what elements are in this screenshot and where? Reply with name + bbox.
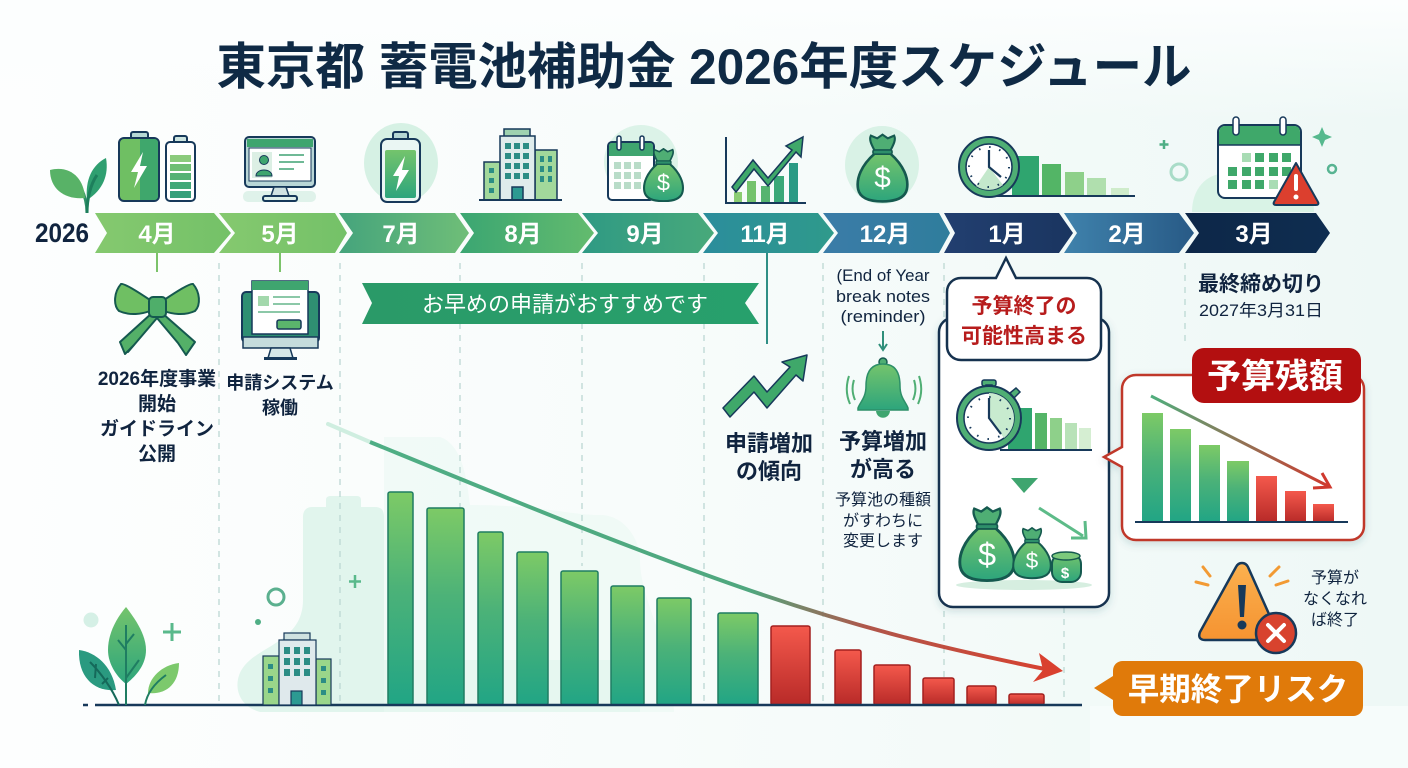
timeline chevrons [95, 213, 1330, 253]
icon: deadline calendar with warning [1160, 117, 1336, 212]
April text block: 公開 [138, 443, 176, 465]
background blob behind chart [237, 437, 674, 712]
November text block: 申請増加 [725, 431, 813, 456]
month: July [339, 213, 469, 253]
December heading: 予算増加 [839, 429, 927, 454]
month: August [460, 213, 594, 253]
month: December [823, 213, 950, 253]
label: remaining budget: 予算残額 [1207, 358, 1343, 396]
December body text: 予算池の種額 [835, 490, 931, 509]
month: April: 4月 [138, 221, 176, 248]
trend arrow: declining budget [370, 442, 1063, 682]
icon: calendar and money bag [604, 125, 683, 201]
May text block: 稼働 [262, 398, 298, 418]
December body text: 変更します [843, 532, 923, 550]
December body text: がすわちに [843, 512, 923, 530]
December heading: が高る [850, 457, 916, 482]
warning note text [1303, 568, 1367, 629]
callout: budget may end: 可能性高まる [961, 325, 1087, 348]
icon: warning triangle [1196, 563, 1296, 653]
December body text [835, 490, 931, 550]
label: remaining budget [1192, 348, 1361, 403]
icon: application system monitor [242, 281, 319, 360]
month: November: 11月 [740, 221, 790, 248]
icon: plant [79, 607, 181, 705]
March deadline text: 最終締め切り [1198, 273, 1324, 296]
icon: green ribbon bow [115, 284, 199, 355]
month: February: 2月 [1108, 221, 1146, 248]
month: January [944, 213, 1073, 253]
callout: budget may end: 予算終了の [972, 295, 1076, 318]
remaining budget bar chart [83, 424, 1082, 705]
December reminder note: (End of Year [836, 266, 930, 285]
callout: budget may end [947, 258, 1101, 360]
icon: small building on baseline [255, 575, 361, 705]
month: May: 5月 [261, 221, 299, 248]
icon: money bag [845, 126, 919, 204]
icon: down triangle [1011, 478, 1038, 493]
tag: early termination risk [1094, 661, 1363, 716]
month: March: 3月 [1235, 221, 1273, 248]
December reminder note [836, 266, 930, 326]
icon: bell [847, 358, 921, 418]
panel: January budget ending [939, 258, 1109, 607]
month: November [703, 213, 834, 253]
December heading [839, 429, 927, 482]
mini bar chart [1135, 396, 1348, 522]
warning note text: 予算が [1311, 568, 1359, 587]
month: August: 8月 [504, 221, 542, 248]
icon: computer with profile [243, 137, 316, 202]
March deadline text [1198, 273, 1324, 320]
December reminder note: break notes [836, 287, 930, 306]
November text block: の傾向 [736, 459, 802, 484]
icon: office building [479, 129, 562, 200]
icon: stopwatch and bars [957, 380, 1092, 450]
month: July: 7月 [382, 221, 420, 248]
month: May [219, 213, 347, 253]
May text block: 申請システム [226, 373, 334, 393]
title: 東京都 蓄電池補助金 2026年度スケジュール [216, 39, 1192, 95]
icon: batteries [119, 132, 195, 201]
tag: early termination risk: 早期終了リスク [1128, 671, 1348, 707]
month: March [1185, 213, 1330, 253]
November text block [725, 431, 813, 484]
April text block [98, 367, 216, 465]
warning note text: ば終了 [1311, 611, 1359, 629]
banner: early application [362, 283, 759, 324]
December reminder note: (reminder) [840, 307, 926, 326]
month: September: 9月 [626, 221, 664, 248]
month: February [1064, 213, 1194, 253]
month: April [95, 213, 231, 253]
March deadline text: 2027年3月31日 [1199, 301, 1323, 320]
May text block [226, 373, 334, 418]
banner: early application: お早めの申請がおすすめです [422, 292, 708, 317]
month: September [582, 213, 714, 253]
icon: battery with glow [364, 123, 438, 203]
April text block: ガイドライン [100, 418, 214, 440]
icon: shrinking money bags: $ [1061, 565, 1070, 582]
warning note text: なくなれ [1303, 590, 1367, 608]
panel: remaining budget [1104, 348, 1364, 540]
icon: rising application arrow [723, 355, 807, 417]
icon: clock and falling bars [959, 137, 1135, 197]
timeline year label: 2026 [35, 218, 89, 248]
arrow: reminder down [879, 331, 887, 350]
April text block: 2026年度事業 [98, 367, 216, 390]
icon: shrinking money bags [956, 507, 1092, 590]
icon: sprout [50, 158, 107, 213]
icon: rising chart [726, 137, 806, 203]
month: January: 1月 [988, 221, 1026, 248]
April text block: 開始 [138, 393, 176, 415]
month: December: 12月 [860, 221, 910, 248]
